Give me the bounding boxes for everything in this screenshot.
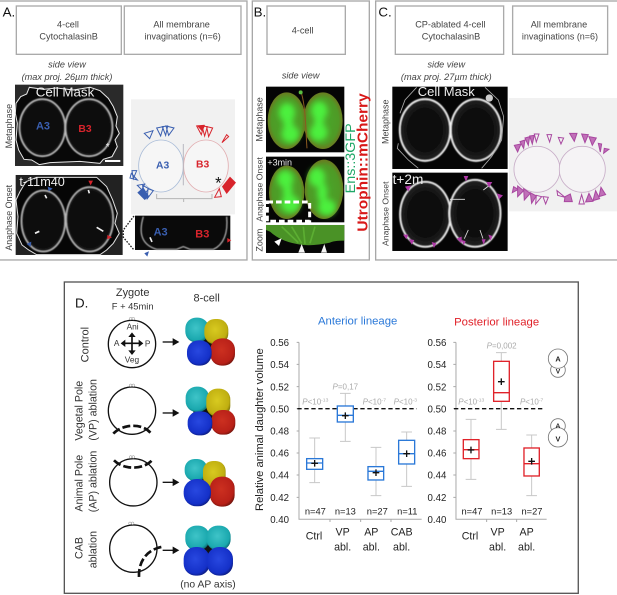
caption: no AP axis: (no AP axis) [180,580,236,591]
header box: CP-ablated [395,6,504,54]
category labels: CAB [391,527,413,539]
header box: all membrane invaginations: All membrane [153,20,210,30]
panel label A: A. [3,5,15,20]
sample sizes: n=27 [521,507,542,517]
panel A [0,1,247,260]
chart: anterior lineage [270,316,422,553]
p values: P=0,002 [487,341,517,350]
y axis ticks: 0.46 [428,449,446,460]
side view caption: (max proj. 26µm thick) [22,72,112,82]
category labels [306,527,413,553]
p values: P<10 [520,397,539,406]
invaginations: purple wedges [512,133,609,204]
micrograph: metaphase: B3 [78,124,92,135]
side view caption: side view [427,60,467,70]
chart: posterior lineage [428,316,547,553]
charts: relative animal daughter volume [254,316,568,553]
header box: 4-cell: 4-cell [292,25,314,35]
sample sizes: n=47 [305,507,326,517]
y axis ticks: 0.48 [270,427,289,438]
p values: P<10 [302,397,321,406]
side view caption: side view [282,70,321,80]
micrograph: zoom inset: B3 [195,228,209,240]
y axis ticks: 0.56 [428,338,446,349]
y axis ticks: 0.52 [428,382,446,393]
row label metaphase: Metaphase [254,97,264,142]
panel B [252,1,371,260]
y axis ticks: 0.42 [270,493,289,504]
category labels: abl. [334,541,351,553]
y axis ticks: 0.42 [428,493,446,504]
column heading: zygote: Zygote [116,287,149,299]
invaginations: red wedges [197,125,229,197]
chart heading: anterior: Anterior lineage [318,316,397,328]
category labels: VP [491,527,505,539]
icon: small A large V cell pair: A [556,423,561,430]
header box: 4-cell CytochalasinB [16,6,121,54]
sample sizes [305,507,417,517]
p values: -13 [321,398,329,404]
y axis ticks [428,338,447,526]
category labels: AP [364,527,378,539]
micrograph: metaphase green [266,87,344,152]
sample sizes: n=27 [367,507,388,517]
zygote: control: Ani [127,322,139,332]
row label metaphase: Metaphase [381,100,391,144]
y axis ticks: 0.50 [270,404,289,415]
p values: P<10 [363,397,382,406]
micrograph: zoom inset: A3 [154,226,168,238]
zygote: control: Veg [125,354,140,364]
y axis ticks: 0.46 [270,449,289,460]
y axis ticks: 0.44 [270,471,290,482]
boxes [463,361,539,476]
y axis ticks: 0.40 [270,515,289,526]
panel label C: C. [378,5,392,20]
row label AP ablation: (AP) ablation [88,451,100,512]
micrograph: metaphase [15,84,123,166]
micrograph: metaphase: Cell Mask [418,84,475,99]
header box: CP-ablated: CP-ablated 4-cell [415,20,485,30]
sample sizes [461,507,542,517]
means [311,412,410,476]
row label anaphase onset: Anaphase Onset [4,184,14,251]
y axis ticks: 0.56 [270,338,289,349]
category labels: abl. [363,541,380,553]
y axis ticks: 0.50 [428,404,446,415]
category labels: AP [520,527,534,539]
icon: large A small V cell pair: V [556,369,561,376]
embryo: CAB ablation [184,526,233,576]
header box: all membrane invaginations: All membrane [531,20,587,30]
category labels: Ctrl [462,531,478,543]
whiskers [309,393,412,496]
row label control: Control [79,327,91,362]
side view caption: (max proj. 27µm thick) [401,72,492,82]
p values: -3 [413,398,417,404]
boxes [307,406,415,480]
category labels: VP [336,527,350,539]
panel D [64,282,578,593]
micrograph: metaphase: Cell Mask [36,84,95,99]
micrograph: zoom inset [135,216,231,257]
channel label Ens::3GFP: Ens::3GFP [343,123,358,193]
y axis ticks: 0.40 [428,515,446,526]
embryo: VP ablation [186,387,235,435]
icon: small A large V cell pair: V [556,434,561,443]
arrows [163,339,178,553]
row label metaphase: Metaphase [4,104,14,148]
y axis ticks [270,338,290,526]
micrograph: anaphase green [266,157,344,222]
column heading: zygote [112,287,154,311]
side view caption: side view [48,60,87,70]
means [468,378,535,465]
icon: large A small V cell pair: A [555,354,561,363]
row label CAB ablation: CAB [73,537,85,559]
category labels: abl. [393,541,410,553]
micrograph: metaphase: * [106,142,110,153]
y axis ticks: 0.54 [270,360,290,371]
micrograph: anaphase onset: t-11m40 [19,175,65,189]
sample sizes: n=47 [461,507,482,517]
category labels [462,527,535,553]
zygote: animal pole ablation [110,456,157,506]
header box: CP-ablated: CytochalasinB [422,32,480,42]
p values: -13 [477,398,485,404]
sample sizes: n=11 [397,507,417,517]
panel label B: B. [254,5,266,20]
header box: all membrane invaginations: invaginations (n=6) [522,32,598,42]
zygote: CAB ablation [110,522,161,577]
y axis ticks: 0.48 [428,427,446,438]
zygote: control: A [114,338,120,348]
category labels: abl. [489,541,506,553]
row label AP ablation [73,451,100,512]
schematic: membrane invaginations A3 B3 [130,99,236,214]
row label CAB ablation: ablation [88,531,100,568]
micrograph: anaphase green: +3min [267,158,292,168]
micrograph: metaphase [392,84,508,169]
channel label Utrophin::mCherry: Utrophin::mCherry [354,93,371,232]
schematic: all membrane invaginations purple [509,98,617,211]
sample sizes: n=13 [335,507,356,517]
embryo: AP ablation [184,459,235,507]
micrograph: metaphase: A3 [36,121,50,133]
column heading: 8-cell: 8-cell [194,292,220,304]
schematic: membrane invaginations A3 B3: * [215,174,222,193]
micrograph: anaphase onset [16,175,123,255]
category labels: abl. [518,541,535,553]
p values [458,341,544,406]
y axis ticks: 0.54 [428,360,447,371]
column heading: zygote: F + 45min [112,301,154,311]
p values: P<10 [458,397,477,406]
header box: all membrane invaginations [513,6,608,54]
panel label D: D. [75,295,88,310]
header box: 4-cell CytochalasinB: 4-cell [57,20,79,30]
y axis ticks: 0.44 [428,471,447,482]
side view caption [401,60,492,82]
whiskers [466,353,537,496]
row label VP ablation: (VP) ablation [88,379,100,441]
p values: -7 [539,398,544,404]
y axis title: Relative animal daughter volume [254,348,266,511]
panel C [376,1,617,260]
row label VP ablation [73,379,100,441]
p values: P=0,17 [333,382,359,391]
header box: 4-cell [267,6,345,54]
row label CAB ablation [73,531,100,568]
header box: 4-cell CytochalasinB: CytochalasinB [39,32,98,42]
y axis ticks: 0.52 [270,382,289,393]
invaginations: blue wedges [130,126,174,199]
zygote: vegetal pole ablation [108,384,156,434]
icon: large A small V cell pair [548,349,568,377]
micrograph: anaphase onset [392,172,508,251]
row label VP ablation: Vegetal Pole [73,381,85,441]
row label zoom: Zoom [254,229,264,252]
schematic: membrane invaginations A3 B3: A3 [156,160,170,171]
zygote: control [108,317,156,368]
embryo: control [185,318,235,366]
micrograph: zoom green [266,225,344,253]
p values: -7 [382,398,386,404]
p values: P<10 [394,397,413,406]
chart heading: posterior: Posterior lineage [454,316,539,328]
header box: all membrane invaginations: invaginations (n=6) [145,32,221,42]
side view caption [22,60,112,82]
row label anaphase onset: Anaphase Onset [381,181,391,246]
p values [302,382,417,406]
header box: all membrane invaginations [124,6,241,54]
row label anaphase onset: Anaphase Onset [254,157,264,222]
icon: small A large V cell pair [548,419,568,447]
schematic: membrane invaginations A3 B3: B3 [196,160,210,171]
row label AP ablation: Animal Pole [73,455,85,512]
zoom connector [123,216,134,250]
micrograph: anaphase onset: t+2m [393,172,423,187]
sample sizes: n=13 [491,507,512,517]
category labels: Ctrl [306,531,322,543]
zygote: control: P [145,338,151,348]
